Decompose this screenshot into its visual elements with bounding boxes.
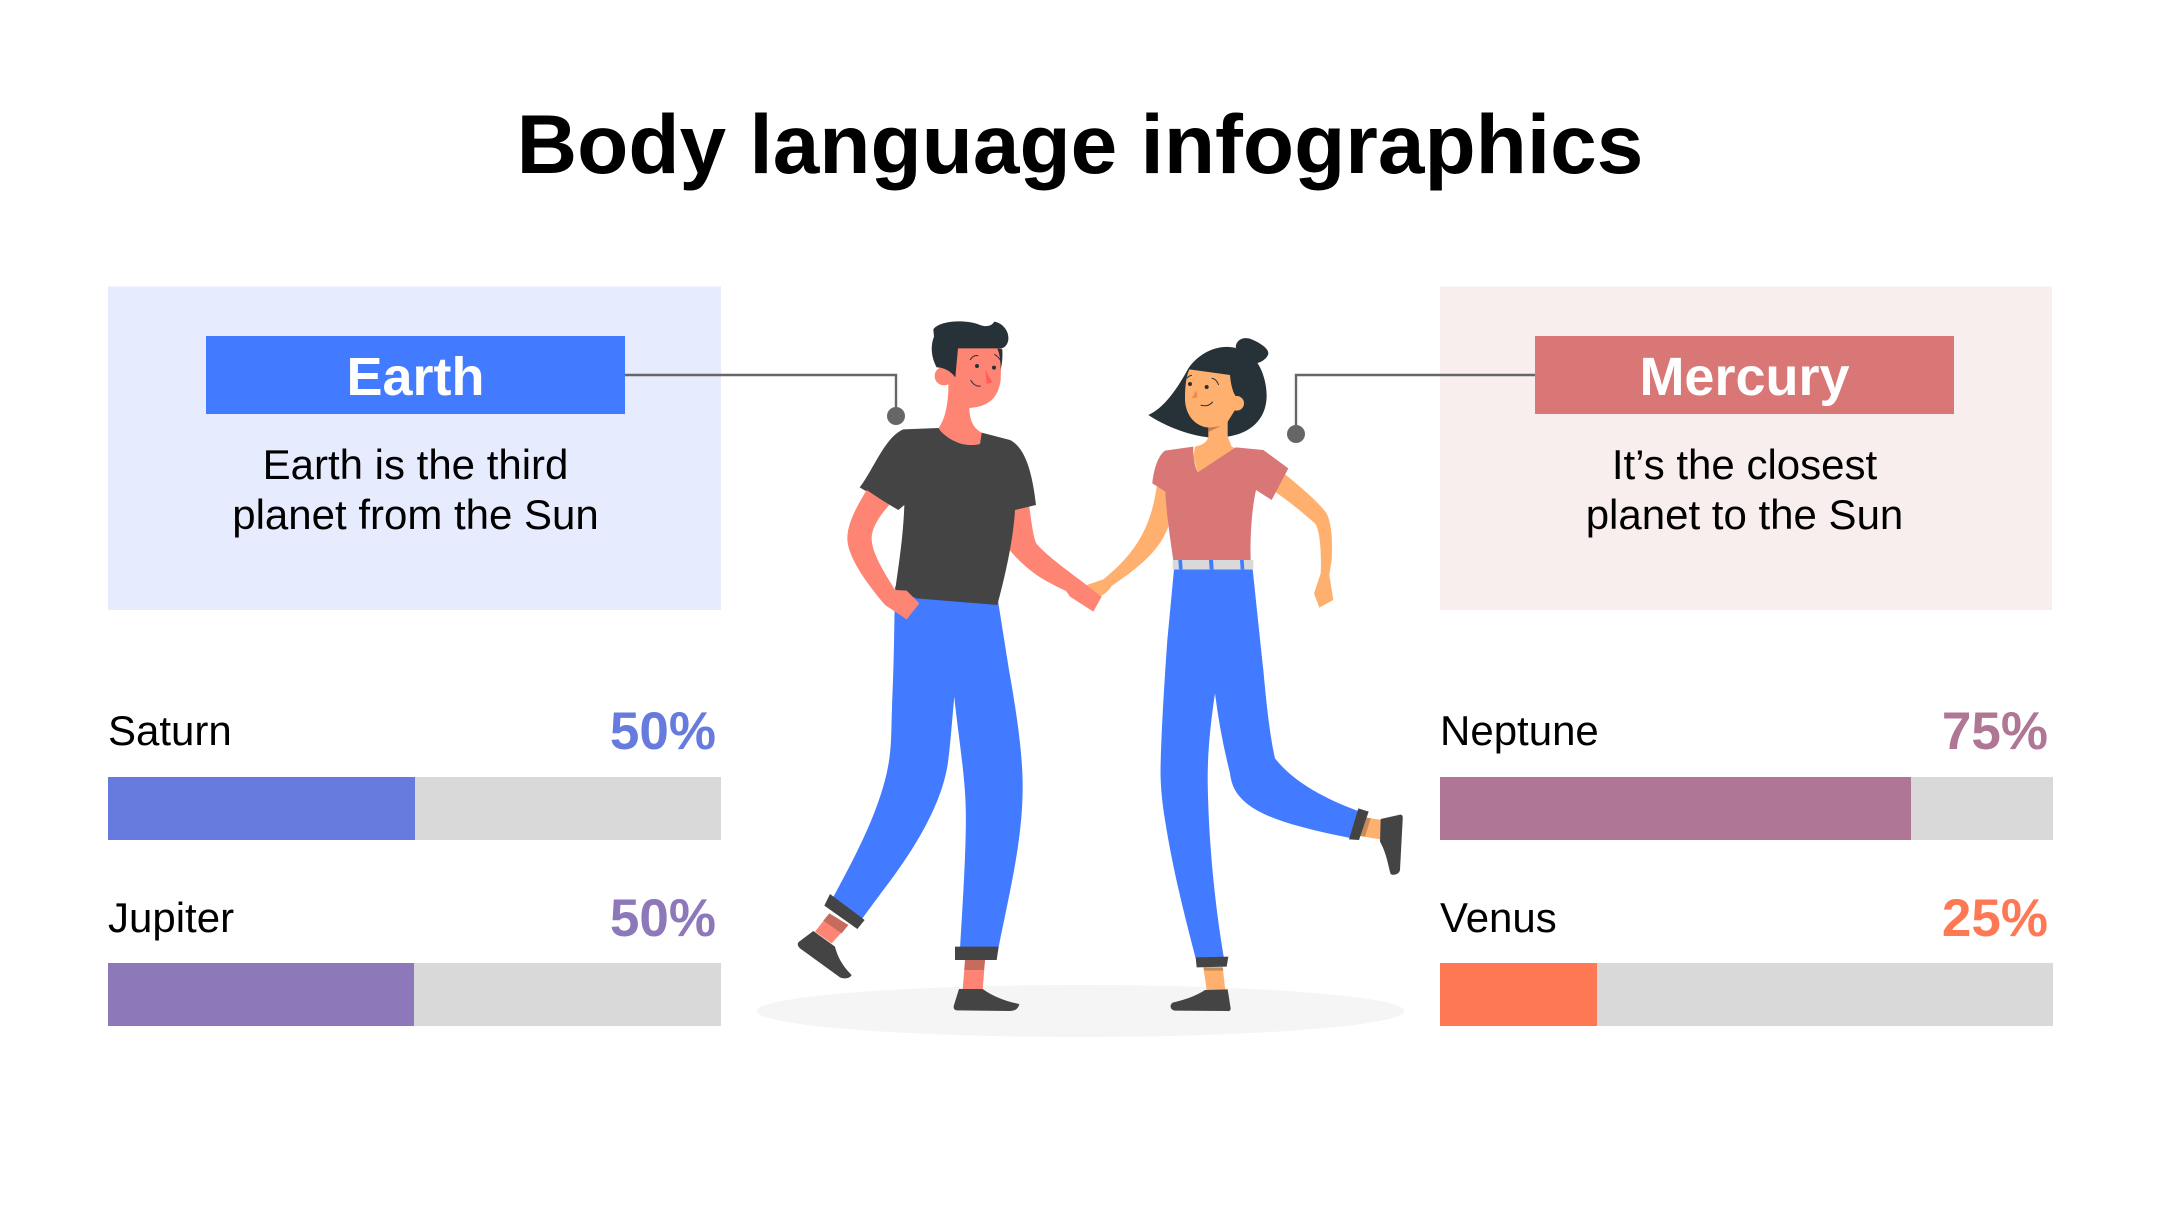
stat: Saturn: 50% bbox=[610, 702, 716, 761]
panel: Earth bbox=[108, 286, 721, 610]
woman upper body bbox=[1087, 338, 1333, 608]
stat: Venus: Venus bbox=[1440, 894, 1557, 941]
man upper body bbox=[847, 321, 1102, 619]
description: Mercury: planet to the Sun bbox=[1586, 491, 1903, 538]
label: Earth bbox=[206, 336, 625, 414]
stat: Saturn bbox=[108, 702, 721, 840]
label: Earth: Earth bbox=[346, 347, 485, 407]
man legs bbox=[798, 587, 1023, 1011]
ground shadow bbox=[756, 985, 1404, 1037]
stat: Jupiter bbox=[108, 889, 721, 1026]
connector: Mercury to woman bbox=[1287, 375, 1535, 443]
stat: Jupiter: Jupiter bbox=[108, 894, 234, 941]
woman legs bbox=[1161, 569, 1403, 1011]
stat: Saturn: Saturn bbox=[108, 707, 232, 754]
description: Earth: planet from the Sun bbox=[232, 491, 599, 538]
stat: Neptune: 75% bbox=[1942, 702, 2048, 761]
stat: Neptune: Neptune bbox=[1440, 707, 1599, 754]
connector: Earth to man bbox=[625, 375, 905, 425]
title: Body language infographics bbox=[517, 97, 1643, 191]
stat: Jupiter: 50% bbox=[610, 889, 716, 948]
description: Earth: Earth is the third bbox=[263, 441, 568, 488]
stat: Neptune bbox=[1440, 702, 2053, 840]
stat: Venus bbox=[1440, 889, 2053, 1026]
description: Mercury: It’s the closest bbox=[1612, 441, 1878, 488]
illustration: woman bbox=[1087, 338, 1403, 1011]
label: Mercury bbox=[1535, 336, 1954, 414]
panel: Mercury bbox=[1440, 286, 2052, 610]
illustration: man bbox=[798, 321, 1102, 1011]
label: Mercury: Mercury bbox=[1639, 347, 1850, 407]
stat: Venus: 25% bbox=[1942, 889, 2048, 948]
